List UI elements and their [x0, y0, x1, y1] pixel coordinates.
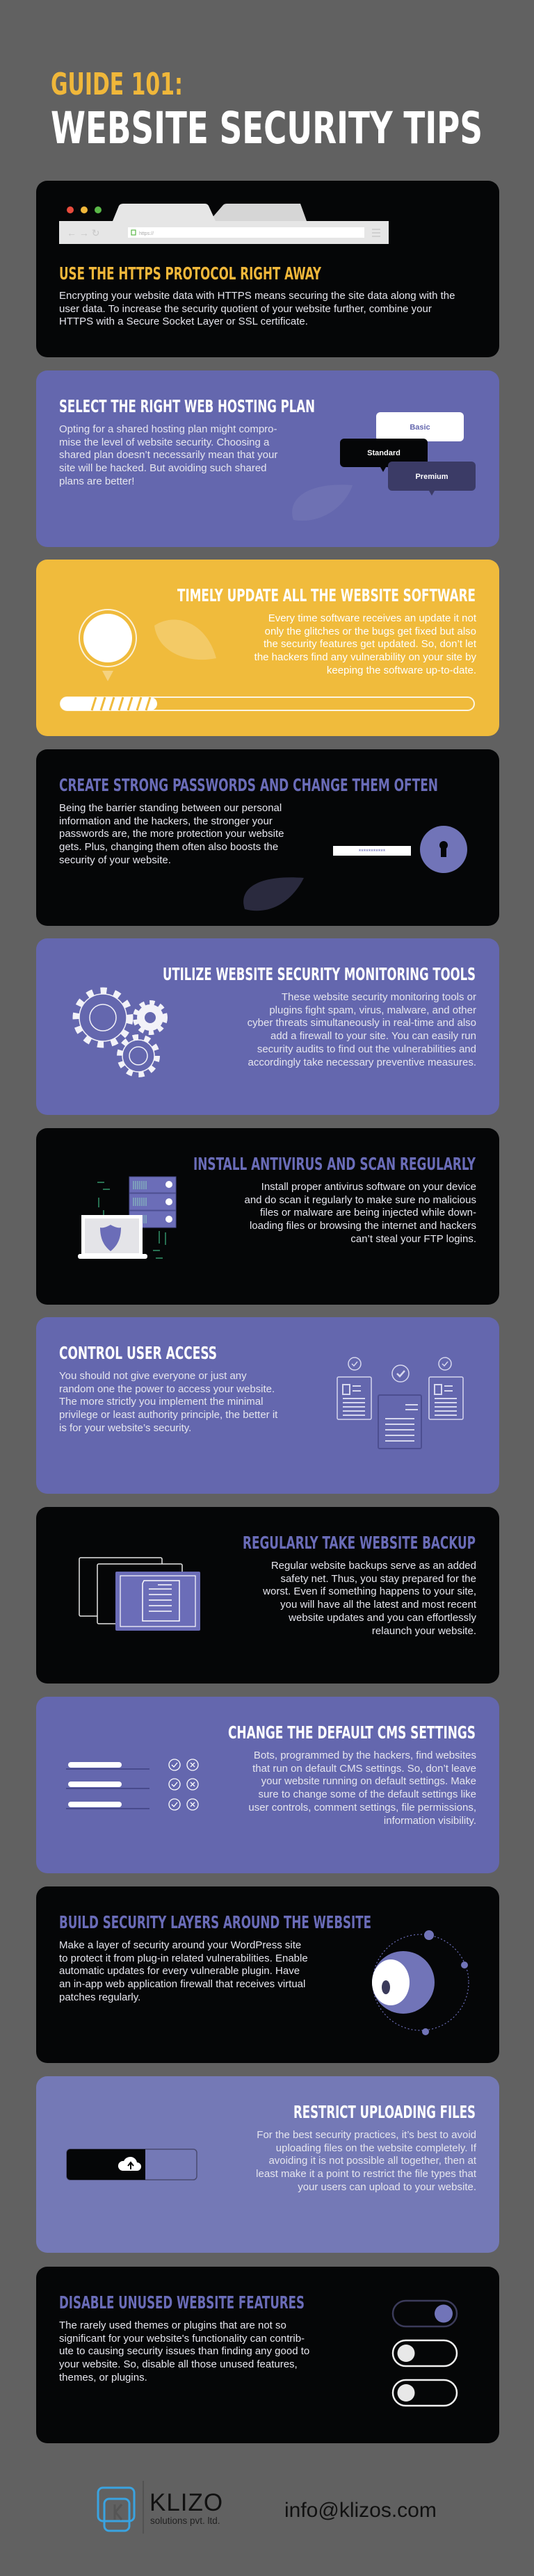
body text [254, 612, 476, 676]
body text [263, 1560, 476, 1637]
body text: automatic updates for every vulnerable plugin. Have [59, 1965, 300, 1977]
body text: For the best security practices, it’s best to avoid [257, 2129, 476, 2141]
title: guide 101: GUIDE 101: [51, 67, 183, 102]
body text: random one the power to access your website. [59, 1383, 275, 1395]
icon: browser: ← → ↻ [67, 227, 100, 238]
body text: can’t steal your FTP logins. [350, 1233, 476, 1245]
icon: update bulb and progress bar [60, 609, 475, 711]
icon: documents with checks [337, 1357, 464, 1449]
panel: update software [36, 560, 499, 736]
brand name: KLIZO [149, 2489, 223, 2516]
body text: accordingly take necessary preventive measures. [248, 1057, 476, 1068]
body text [248, 991, 476, 1068]
icon: browser [59, 204, 389, 244]
icon: backup frames [79, 1557, 200, 1631]
panel: user access [36, 1317, 499, 1494]
body text: Being the barrier standing between our personal [59, 802, 282, 814]
body text: site will be hacked. But avoiding such shared [59, 462, 267, 474]
body text: least make it a point to restrict the file types that [256, 2168, 476, 2180]
footer [97, 2481, 437, 2534]
body text: information and the hackers, the stronger your [59, 815, 273, 827]
body text: The rarely used themes or plugins that are not so [59, 2320, 286, 2331]
body text [59, 423, 278, 487]
icon: toggles [392, 2299, 458, 2406]
panel: passwords [36, 749, 499, 926]
body text: themes, or plugins. [59, 2372, 147, 2383]
heading: BUILD SECURITY LAYERS AROUND THE WEBSITE [59, 1912, 371, 1932]
body text: cyber threats simultaneously in real-time and also [248, 1017, 476, 1029]
body text: add a firewall to your site. You can easily run [270, 1030, 476, 1042]
body text: Every time software receives an update it not [268, 612, 476, 624]
body text: These website security monitoring tools or [282, 991, 476, 1003]
body text [59, 802, 284, 866]
body text: HTTPS with a Secure Socket Layer or SSL certificate. [59, 316, 308, 327]
body text: gets. Plus, changing them often also boosts the [59, 841, 278, 853]
brand tagline: solutions pvt. ltd. [150, 2516, 220, 2526]
body text [256, 2129, 477, 2193]
panel: uploading files [36, 2076, 499, 2253]
body text: safety net. Thus, you stay prepared for the [280, 1573, 476, 1585]
body text: privilege or least authority principle, the better it [59, 1409, 277, 1421]
body text: uploading files on the website completely. If [276, 2142, 476, 2154]
body text: loading files or browsing the internet and hackers [250, 1220, 476, 1232]
body text: Regular website backups serve as an added [271, 1560, 476, 1572]
body text: You should not give everyone or just any [59, 1370, 247, 1382]
panel: https [36, 181, 499, 357]
icon: plan bubbles: Standard [367, 449, 400, 457]
body text [59, 290, 455, 327]
email: info@klizos.com [284, 2499, 437, 2522]
body text: user controls, comment settings, file permissions, [248, 1802, 476, 1813]
icon: password lock [243, 826, 467, 911]
heading: USE THE HTTPS PROTOCOL RIGHT AWAY [59, 263, 322, 284]
body text [59, 1370, 278, 1434]
body text [248, 1750, 476, 1827]
body text: user data. To increase the security quotient of your website further, combine your [59, 303, 432, 315]
body text: to protect it from plug-in related vulnerabilities. Enable [59, 1953, 308, 1964]
body text: your website. So, disable all those unused features, [59, 2358, 298, 2370]
body text: security audits to find out the vulnerabilities and [257, 1043, 476, 1055]
body text: plugins fight spam, virus, malware, and other [269, 1004, 476, 1016]
body text: the security features get updated. So, don’t let [264, 638, 476, 650]
body text: significant for your website's functionality can contrib- [59, 2333, 305, 2345]
body text [59, 2320, 309, 2383]
body text: Install proper antivirus software on your device [261, 1181, 476, 1193]
body text: The more strictly you implement the minimal [59, 1396, 263, 1408]
body text: that run on default CMS settings. So, don’t leave [252, 1763, 476, 1775]
heading: DISABLE UNUSED WEBSITE FEATURES [59, 2292, 305, 2313]
body text: files or malware are being injected while down- [260, 1207, 476, 1218]
body text: and do scan it regularly to make sure no malicious [244, 1194, 476, 1206]
icon: upload bar [66, 2149, 197, 2180]
body text: Encrypting your website data with HTTPS means securing the site data along with the [59, 290, 455, 302]
body text: plans are better! [59, 475, 134, 487]
icon: gears [72, 987, 168, 1077]
panel: security layers [36, 1886, 499, 2063]
body text: you will have all the latest and most recent [280, 1599, 476, 1611]
panel: hosting plan [36, 370, 499, 547]
body text: worst. Even if something happens to your site, [263, 1585, 476, 1597]
heading: CONTROL USER ACCESS [59, 1343, 217, 1363]
body text: Bots, programmed by the hackers, find websites [254, 1750, 476, 1761]
body text: Opting for a shared hosting plan might compro- [59, 423, 277, 435]
panel: monitoring tools [36, 938, 499, 1115]
body text [244, 1181, 476, 1245]
body text: mise the level of website security. Choosing a [59, 437, 269, 448]
icon: plan bubbles [292, 412, 476, 521]
body text: security of your website. [59, 854, 171, 866]
body text: avoiding it is not possible all together, then at [268, 2155, 476, 2167]
icon: browser: https:// [139, 231, 154, 236]
icon: server and laptop [78, 1176, 177, 1259]
body text: your users can upload to your website. [298, 2181, 476, 2193]
panel: antivirus [36, 1128, 499, 1305]
icon: plan bubbles: Basic [410, 423, 430, 432]
body text: shared plan doesn’t necessarily mean that your [59, 449, 277, 461]
panel: backup [36, 1507, 499, 1684]
body text: only the glitches or the bugs get fixed but also [265, 626, 476, 637]
heading: SELECT THE RIGHT WEB HOSTING PLAN [59, 396, 315, 416]
body text: Make a layer of security around your WordPress site [59, 1939, 301, 1951]
body text: keeping the software up-to-date. [327, 665, 476, 676]
icon: eye orbit [372, 1930, 469, 2035]
icon: klizo logo [97, 2481, 143, 2534]
icon: plan bubbles: Premium [415, 473, 448, 481]
body text: is for your website’s security. [59, 1422, 191, 1434]
body text: website updates and you can effortlessly [289, 1612, 476, 1624]
panel: disable features [36, 2267, 499, 2443]
body text: patches regularly. [59, 1991, 140, 2003]
body text: an in-app web application firewall that receives virtual [59, 1978, 305, 1990]
icon: settings toggles [66, 1759, 199, 1811]
body text: passwords are, the more protection your website [59, 828, 284, 840]
icon: password lock: *********** [359, 848, 386, 855]
body text: relaunch your website. [372, 1625, 476, 1637]
title [51, 67, 483, 153]
body text: sure to change some of the default settings like [258, 1788, 476, 1800]
panel: cms settings [36, 1697, 499, 1873]
body text: your website running on default settings. Make [261, 1775, 476, 1787]
body text: ute to causing security issues than finding any good to [59, 2345, 309, 2357]
body text [59, 1939, 308, 2003]
body text: information visibility. [384, 1815, 476, 1827]
body text: the hackers find any vulnerability on your site by [254, 651, 476, 663]
